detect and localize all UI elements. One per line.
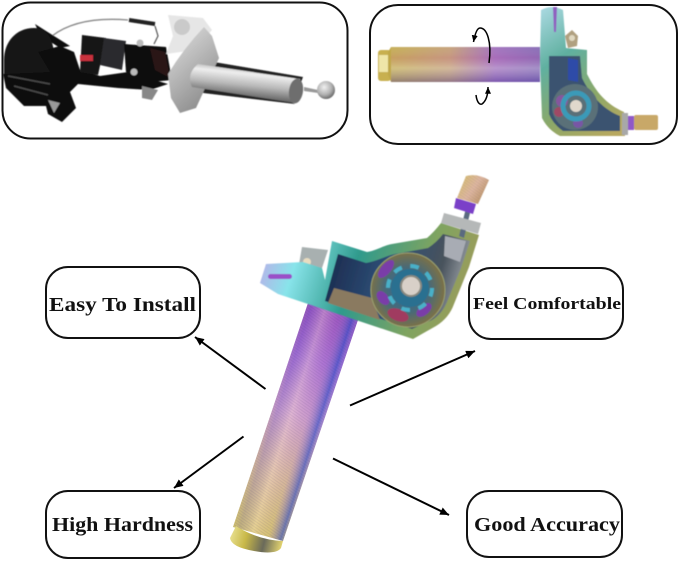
- callout: Feel Comfortable: [469, 268, 623, 339]
- arrow: upper rotation: [474, 28, 490, 63]
- arrow: lower rotation: [476, 87, 488, 104]
- callout: Good Accuracy: Good Accuracy: [474, 514, 620, 536]
- icon: end cap: [230, 526, 283, 552]
- callout: Good Accuracy: [467, 491, 622, 557]
- callout: High Hardness: [46, 491, 200, 558]
- icon: knurled grip tube: [233, 300, 360, 541]
- icon: throttle housing with gear: [260, 175, 489, 339]
- arrow: to Feel Comfortable: [350, 351, 475, 406]
- panel: rotating grip photo: [370, 5, 677, 144]
- callout: Feel Comfortable: Feel Comfortable: [473, 294, 622, 313]
- callout: Easy To Install: [46, 267, 200, 338]
- callout: High Hardness: High Hardness: [52, 514, 193, 536]
- arrow: to Good Accuracy: [333, 458, 449, 515]
- panel: installed throttle photo: [2, 2, 348, 138]
- callout: Easy To Install: Easy To Install: [49, 294, 197, 316]
- icon: gold grip with bracket and gear: [378, 7, 658, 136]
- arrow: to High Hardness: [174, 436, 244, 488]
- icon: motorcycle handlebar assembly: [3, 15, 335, 122]
- arrow: to Easy To Install: [195, 337, 266, 389]
- main throttle illustration: [230, 175, 489, 552]
